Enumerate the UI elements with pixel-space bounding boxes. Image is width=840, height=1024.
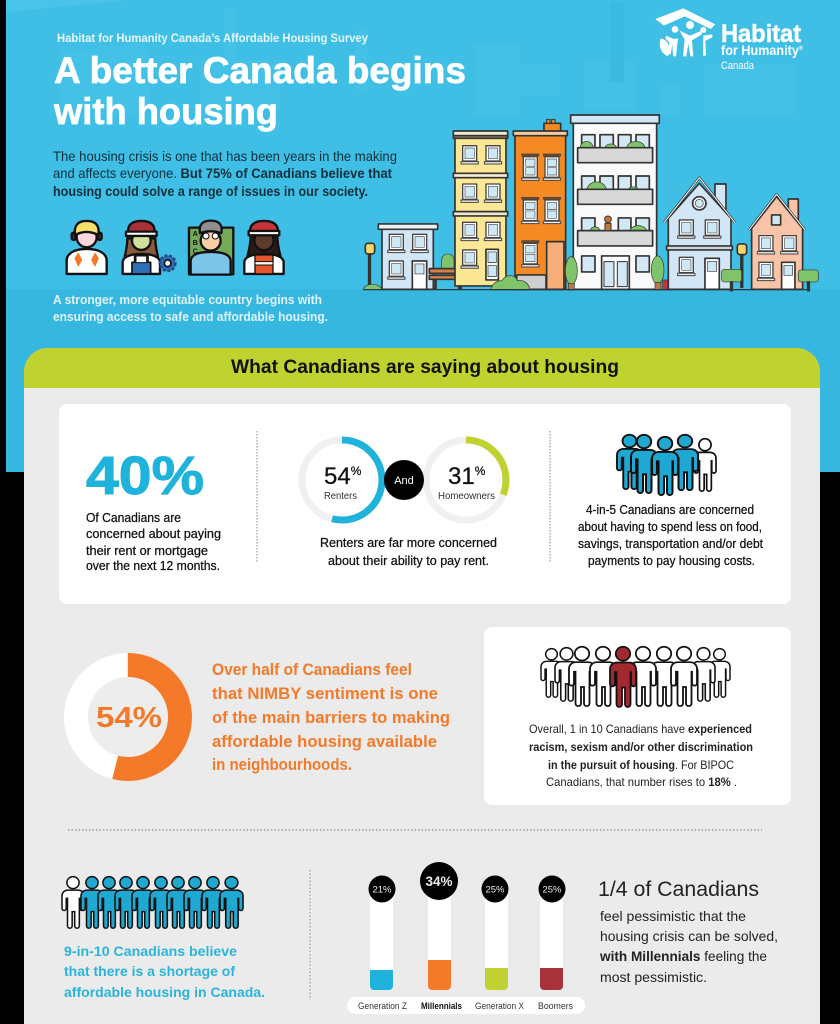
logo: Habitat for Humanity Canada: Canada xyxy=(721,60,755,72)
NIMBY statement: affordable housing available xyxy=(212,732,437,751)
peach house xyxy=(749,194,818,291)
generation labels: Generation Z xyxy=(358,1001,407,1012)
shortage statement: 9-in-10 Canadians believe xyxy=(64,943,237,959)
icon: teacher with chalkboard xyxy=(189,221,233,275)
intro text: and affects everyone. But 75% of Canadians believe that xyxy=(53,165,392,181)
green header xyxy=(24,348,820,388)
icon: worker in yellow cap xyxy=(67,221,107,274)
closing statement: A stronger, more equitable country begins with xyxy=(53,292,322,307)
discrimination text: Canadians, that number rises to 18% . xyxy=(546,775,737,789)
discrimination text: Overall, 1 in 10 Canadians have experienced xyxy=(529,722,752,736)
ground line xyxy=(363,288,807,292)
blue house xyxy=(664,178,735,289)
bar: Boomers: 25% xyxy=(542,884,562,896)
street illustration xyxy=(363,115,818,291)
icon: worker with gear xyxy=(123,221,175,274)
bar: Generation Z xyxy=(368,876,396,990)
And badge xyxy=(384,460,424,500)
renters caption xyxy=(320,536,497,568)
title: A better Canada begins xyxy=(54,50,466,91)
icon: four workers xyxy=(67,221,284,275)
40% description: concerned about paying xyxy=(86,527,221,541)
statement body: with Millennials feeling the xyxy=(599,948,767,964)
panel: discrimination card xyxy=(484,627,791,805)
donut: renters 54%: 54 xyxy=(324,463,351,490)
bar chart: pessimism by generation xyxy=(347,862,585,1014)
statement body: most pessimistic. xyxy=(600,969,707,985)
discrimination text: racism, sexism and/or other discrimination xyxy=(529,740,753,754)
NIMBY statement: of the main barriers to making xyxy=(212,708,450,727)
main gray panel xyxy=(24,348,820,1024)
intro text xyxy=(53,148,397,199)
And badge: And xyxy=(394,475,414,487)
bushes and trees xyxy=(491,256,671,290)
tree and bench xyxy=(429,254,465,289)
lamp and bush right of blue house xyxy=(722,244,747,291)
survey label: Habitat for Humanity Canada’s Affordable Housing Survey xyxy=(57,33,369,45)
NIMBY statement: in neighbourhoods. xyxy=(212,755,352,774)
closing statement: ensuring access to safe and affordable housing. xyxy=(53,309,328,324)
bar: Boomers xyxy=(538,876,566,990)
generation labels: Generation X xyxy=(475,1001,525,1012)
statement body: housing crisis can be solved, xyxy=(600,928,778,944)
discrimination text xyxy=(529,722,753,789)
discrimination text: in the pursuit of housing. For BIPOC xyxy=(548,758,734,772)
40% description: Of Canadians are xyxy=(86,511,181,525)
40% description: over the next 12 months. xyxy=(86,559,220,573)
statement body xyxy=(599,908,778,985)
street lamp left xyxy=(363,243,382,289)
small blue building xyxy=(378,224,438,289)
bar: Generation X: 25% xyxy=(485,884,505,896)
pessimism statement xyxy=(598,878,778,985)
icon: teacher with chalkboard: A xyxy=(193,229,199,238)
donut: renters 54% xyxy=(302,440,382,520)
renters caption: about their ability to pay rent. xyxy=(328,554,489,568)
donut: renters 54%: Renters xyxy=(324,491,357,502)
hero background xyxy=(6,0,840,472)
NIMBY statement: that NIMBY sentiment is one xyxy=(212,684,438,703)
white apartment block xyxy=(571,115,659,289)
statement body: feel pessimistic that the xyxy=(600,908,746,924)
icon: 1 of 10 people xyxy=(541,647,730,707)
logo: Habitat for Humanity Canada: for Humanity xyxy=(721,43,804,58)
statement heading: 1/4 of Canadians xyxy=(598,878,759,901)
40% description xyxy=(86,511,221,573)
yellow building xyxy=(453,131,508,286)
NIMBY statement xyxy=(212,660,450,774)
intro text: The housing crisis is one that has been years in the making xyxy=(53,148,397,164)
NIMBY statement: Over half of Canadians feel xyxy=(212,660,412,679)
4-in-5 description xyxy=(578,503,764,568)
4-in-5 description: about having to spend less on food, xyxy=(578,520,762,534)
icon: 4 of 5 people xyxy=(617,435,716,495)
heading: What Canadians are saying about housing xyxy=(231,357,619,378)
title: with housing xyxy=(53,91,278,132)
40% description: their rent or mortgage xyxy=(86,544,208,558)
donut: NIMBY 54%: 54% xyxy=(96,702,162,734)
closing statement xyxy=(53,292,328,324)
icon: teacher with chalkboard: B xyxy=(193,238,198,247)
donut: homeowners 31%: Homeowners xyxy=(438,491,495,502)
bar: Millennials: 34% xyxy=(425,874,453,889)
shortage statement xyxy=(64,943,265,1000)
generation labels xyxy=(347,997,585,1014)
renters caption: Renters are far more concerned xyxy=(320,536,497,550)
intro text: housing could solve a range of issues in our society. xyxy=(53,183,368,199)
icon: worker with red helmet xyxy=(244,221,284,274)
bar: Millennials xyxy=(420,862,458,990)
donut: homeowners 31%: % xyxy=(475,464,486,478)
panel: top statistics card xyxy=(59,404,791,604)
4-in-5 description: savings, transportation and/or debt xyxy=(578,537,764,551)
bar: Generation Z: 21% xyxy=(372,884,392,896)
shortage statement: affordable housing in Canada. xyxy=(64,984,265,1000)
logo: Habitat for Humanity Canada: ® xyxy=(799,45,804,52)
icon: teacher with chalkboard: C xyxy=(193,246,199,255)
bar: Generation X xyxy=(482,876,508,990)
logo: Habitat for Humanity Canada: Habitat xyxy=(721,20,802,48)
donut: renters 54%: % xyxy=(351,464,362,478)
generation labels: Millennials xyxy=(421,1001,462,1012)
icon: roof and people xyxy=(655,8,715,56)
shortage statement: that there is a shortage of xyxy=(64,963,235,979)
4-in-5 description: payments to pay housing costs. xyxy=(588,554,755,568)
donut: homeowners 31% xyxy=(426,440,506,520)
title xyxy=(53,50,466,132)
stat: 40%: 40% xyxy=(86,446,204,506)
stat: 40% xyxy=(86,446,221,573)
donut: NIMBY 54% xyxy=(64,653,192,781)
generation labels: Boomers xyxy=(538,1001,573,1012)
4-in-5 description: 4-in-5 Canadians are concerned xyxy=(586,503,754,517)
logo: Habitat for Humanity Canada xyxy=(655,8,804,72)
icon: 9 of 10 people xyxy=(62,877,243,928)
donut: homeowners 31%: 31 xyxy=(448,463,475,490)
orange building xyxy=(513,119,567,289)
